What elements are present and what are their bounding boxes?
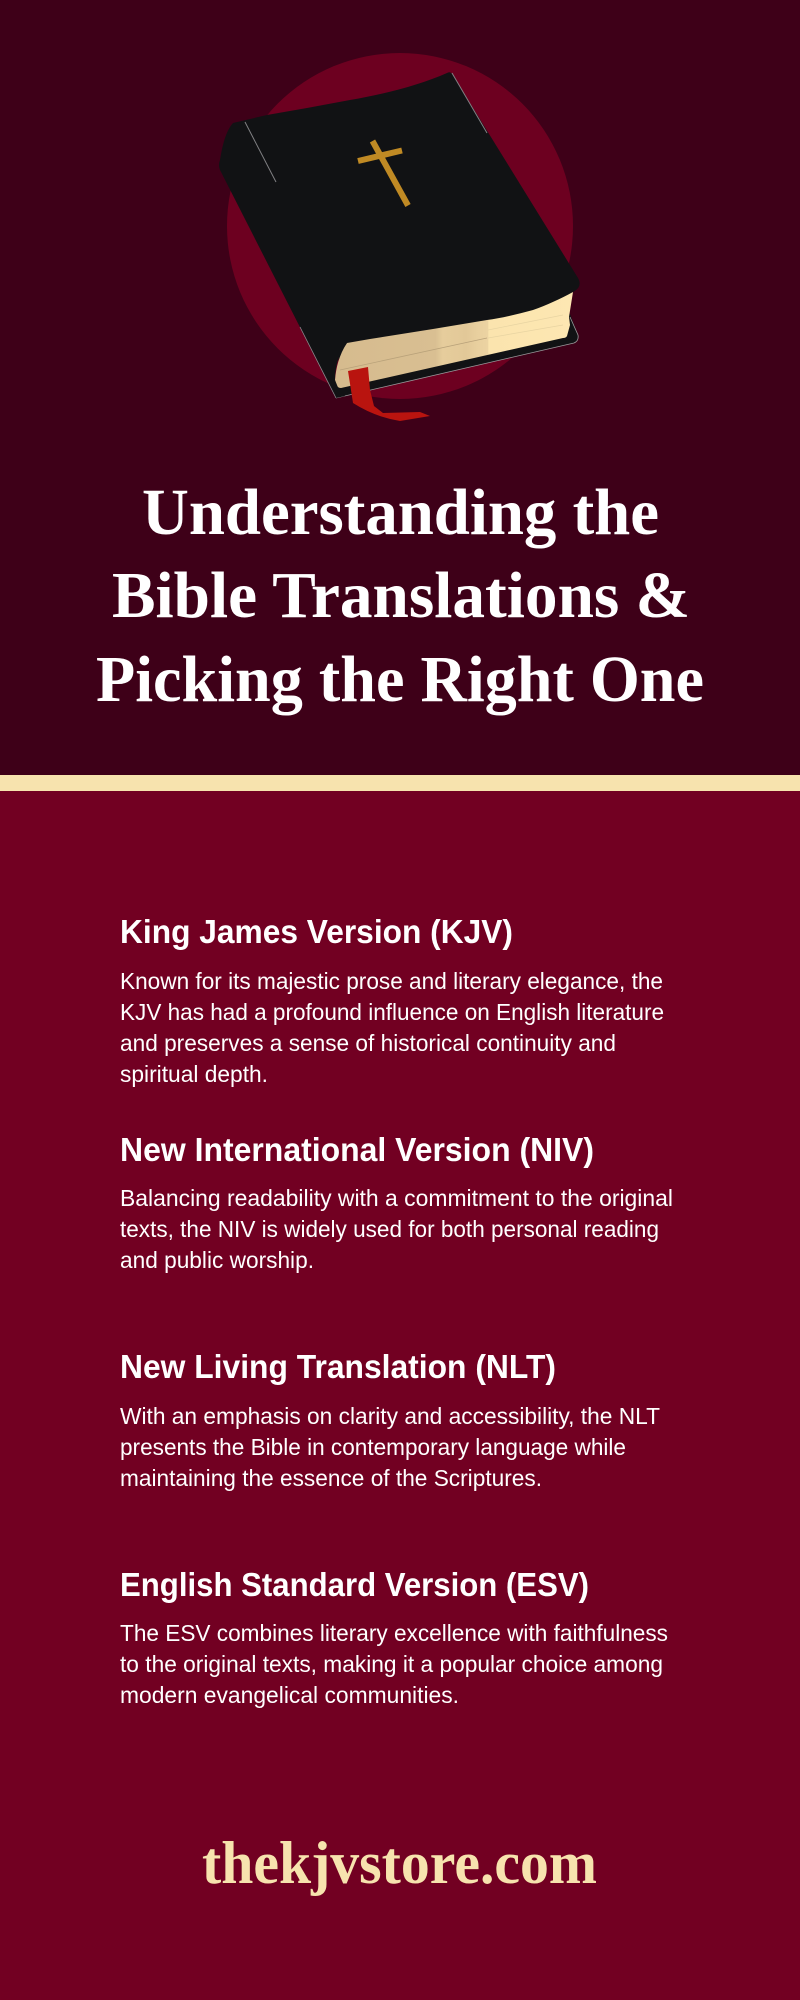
text: ESV description: to the original texts, making it a popular choice among [120,1651,663,1677]
gold cross [358,141,408,206]
front cover [219,72,580,398]
page lines [340,338,487,370]
cover highlight lines [245,73,487,182]
section: English Standard Version [120,1566,668,1708]
text: NIV description: texts, the NIV is widely used for both personal reading [120,1216,659,1242]
back cover edge highlight [336,317,578,398]
text: KJV description: Known for its majestic prose and literary elegance, the [120,968,663,994]
text: NIV description [120,1185,673,1273]
panel: content background [0,791,800,2000]
heading: NIV: New International Version (NIV) [120,1131,594,1168]
heading: KJV: King James Version (KJV) [120,913,513,950]
text: NLT description: presents the Bible in contemporary language while [120,1434,626,1460]
text: ESV description: The ESV combines literary excellence with faithfulness [120,1620,668,1646]
text: NLT description: With an emphasis on clarity and accessibility, the NLT [120,1403,660,1429]
heading: ESV: English Standard Version (ESV) [120,1566,589,1603]
text: ESV description [120,1620,668,1708]
text: KJV description: and preserves a sense of historical continuity and [120,1030,616,1056]
cross upright [372,141,408,206]
text: NIV description: Balancing readability with a commitment to the original [120,1185,673,1211]
text: NLT description: maintaining the essence of the Scriptures. [120,1465,542,1491]
text: ESV description: modern evangelical communities. [120,1682,459,1708]
section: King James Version [120,913,664,1087]
icon: circle behind bible [227,53,573,399]
title: Picking the Right One [96,643,704,716]
title [96,476,704,716]
text: NIV description: and public worship. [120,1247,314,1273]
page lines light [488,315,563,338]
text: KJV description: KJV has had a profound influence on English literature [120,999,664,1025]
title: Bible Translations & [112,559,690,632]
text: KJV description: spiritual depth. [120,1061,268,1087]
panel: header background [0,0,800,775]
back cover [336,314,578,398]
title: Understanding the [142,476,659,549]
text: NLT description [120,1403,660,1491]
cover left edge highlight [300,327,336,398]
cross beam [358,150,402,161]
footer website: thekjvstore.com [202,1830,597,1896]
cream divider band [0,775,800,791]
page block [335,280,573,388]
section: New International Version [120,1131,673,1273]
red ribbon bookmark [348,367,430,421]
text: KJV description [120,968,664,1087]
section: New Living Translation [120,1348,660,1491]
heading: NLT: New Living Translation (NLT) [120,1348,556,1385]
icon: black bible with gold cross [219,72,580,421]
